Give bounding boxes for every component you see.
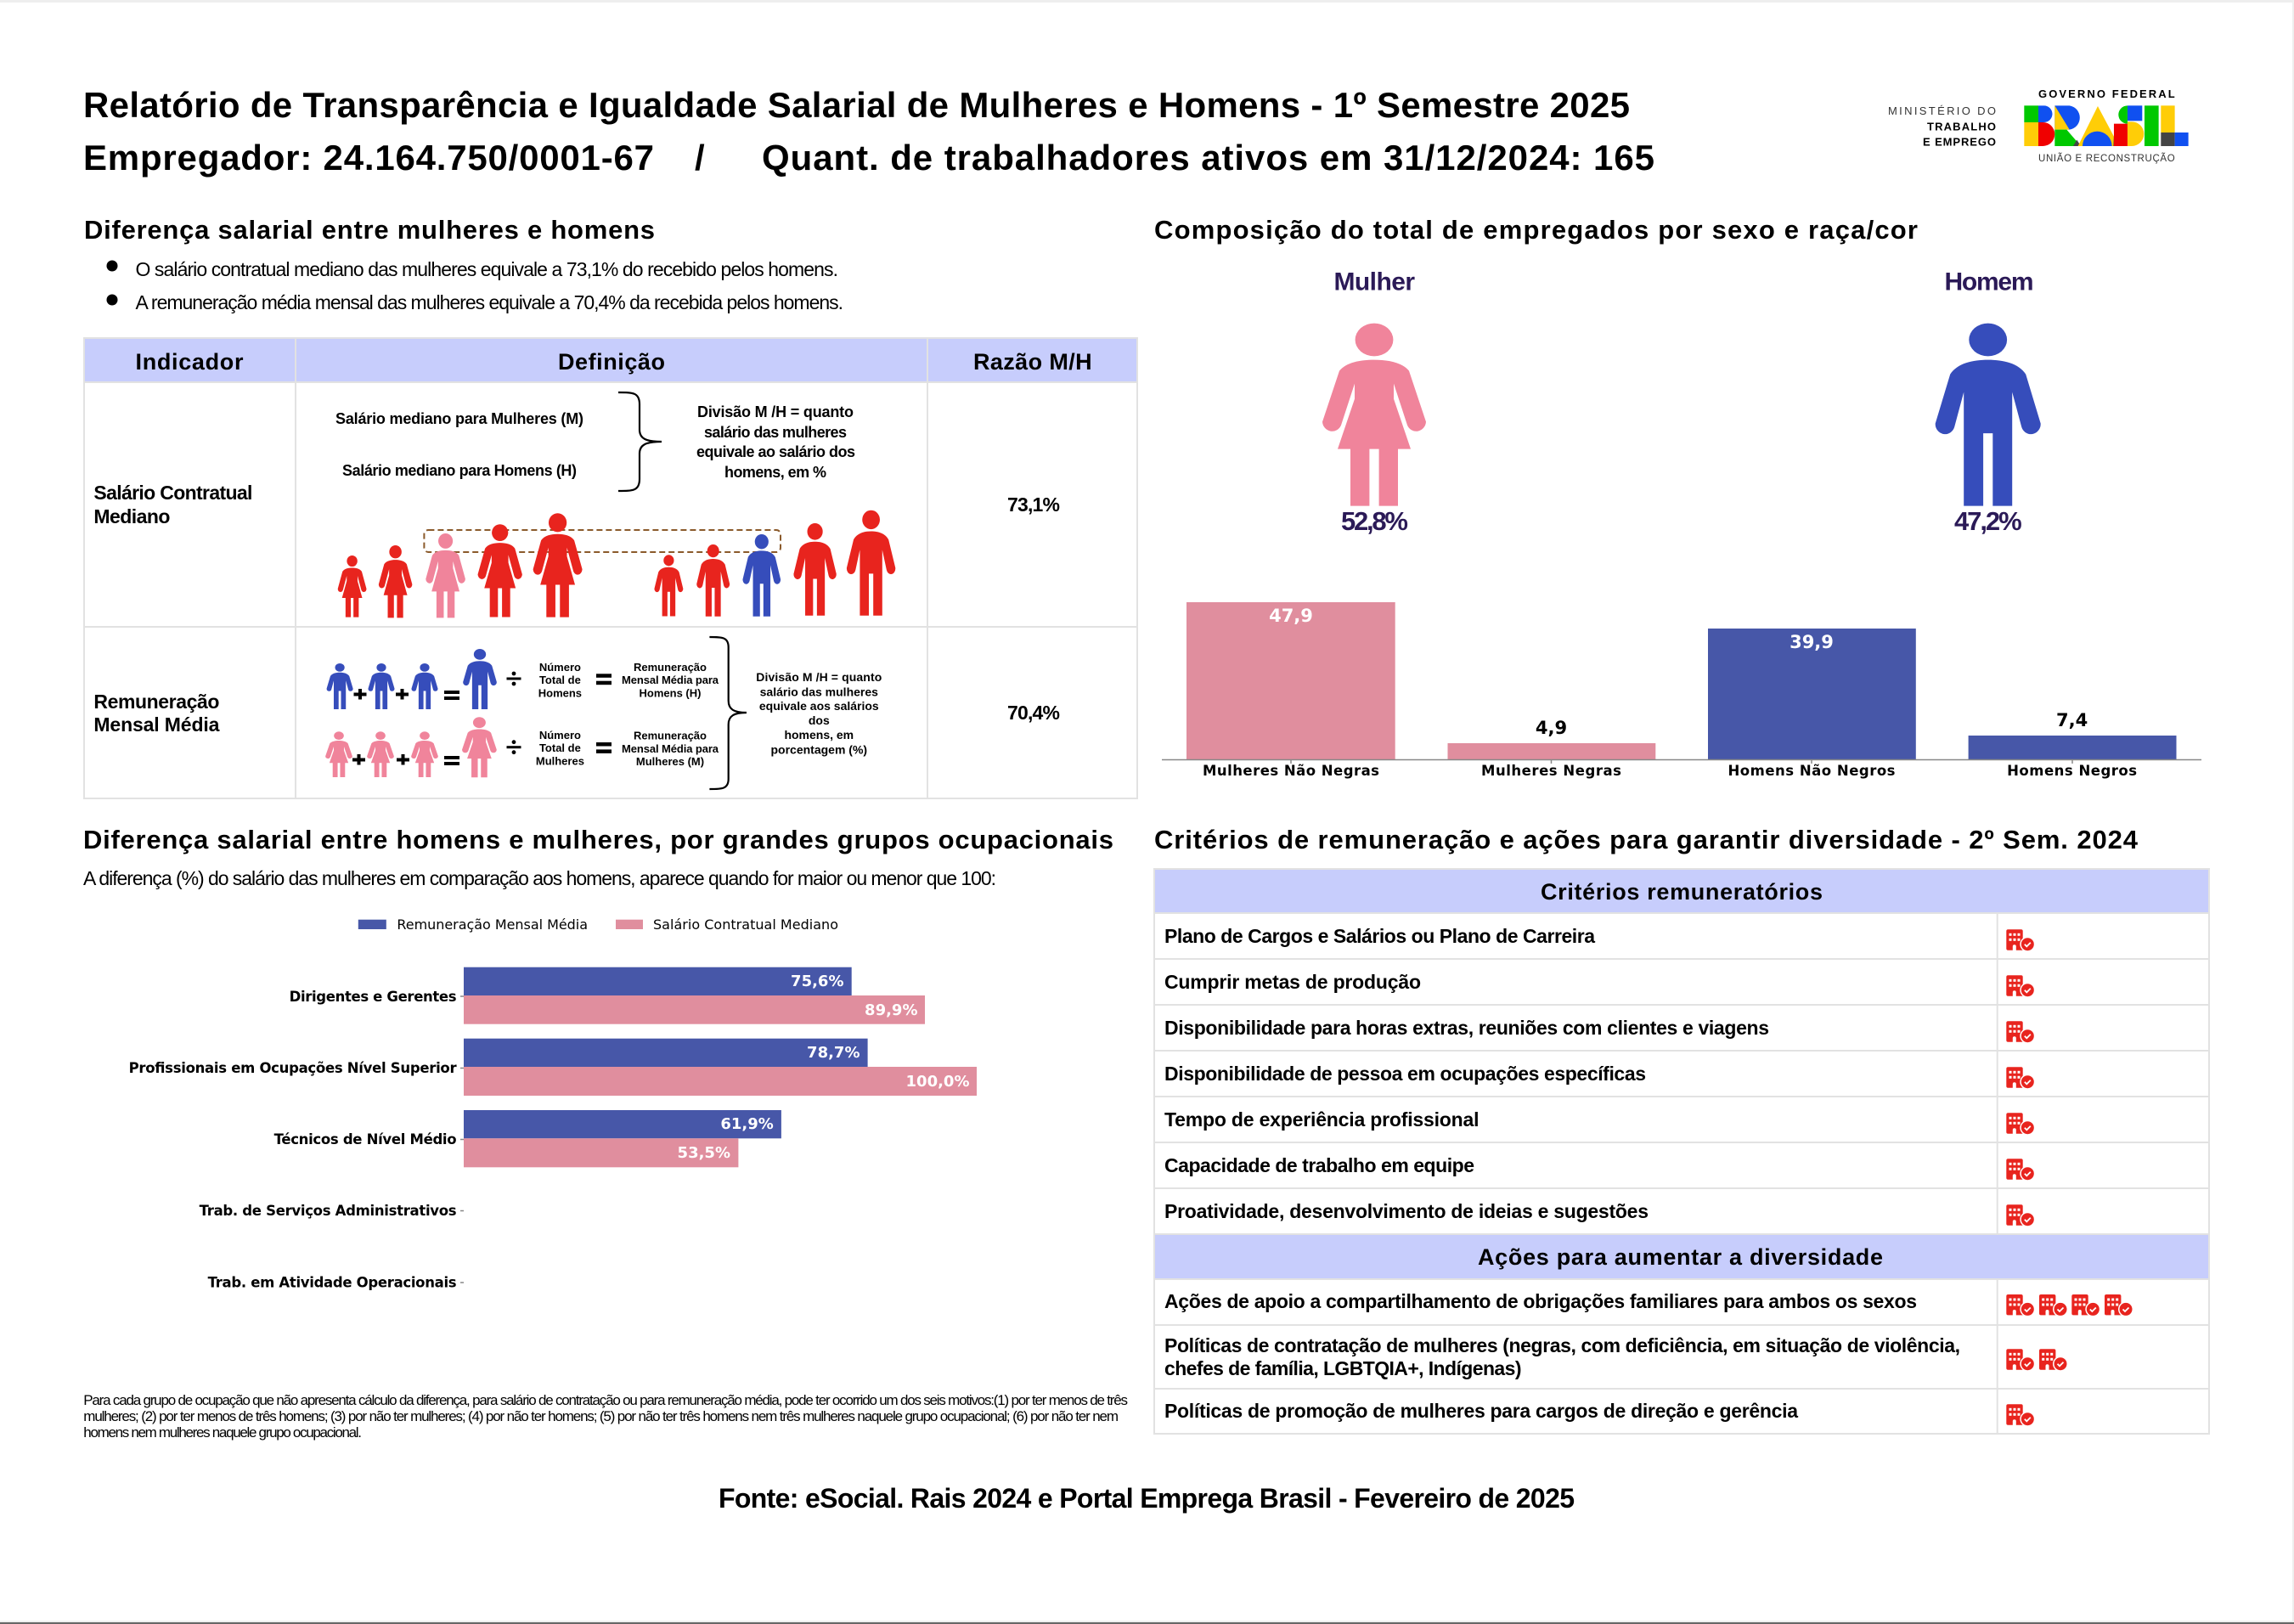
definition: average pay: Homens (H): [640, 686, 701, 700]
panel: indicator table: 73,1%: [1007, 493, 1060, 516]
definition: average pay: Divisão M /H = quanto: [756, 670, 882, 684]
bar chart: occupational groups: Profissionais em Ocupações Nível Superior: [129, 1060, 457, 1076]
bar chart: sex and race: 4,9: [1536, 718, 1567, 738]
panel: criteria table: Capacidade de trabalho em equipe: [1164, 1154, 1474, 1176]
source line: Fonte: eSocial. Rais 2024 e Portal Emprega Brasil - Fevereiro de 2025: [719, 1483, 1575, 1514]
title: Empregador: 24.164.750/0001-67: [83, 138, 654, 178]
panel: indicator table: Salário Contratual: [93, 482, 252, 504]
definition: average pay: Homens: [538, 686, 582, 700]
bar chart: sex and race: Mulheres Negras: [1481, 763, 1621, 779]
panel: indicator table: Remuneração: [93, 691, 219, 713]
panel: criteria table: chefes de família, LGBTQIA+, Indígenas): [1164, 1357, 1522, 1379]
definition: average pay: Mensal Média para: [622, 742, 719, 755]
icons: company check marks: [2006, 929, 2133, 1427]
bar chart: sex and race: 7,4: [2056, 710, 2088, 730]
definition: average pay: [325, 637, 882, 789]
panel: indicator table: Indicador: [136, 349, 244, 375]
panel: criteria table: Proatividade, desenvolvimento de ideias e sugestões: [1164, 1200, 1649, 1222]
definition: average pay: Número: [539, 729, 581, 742]
heading: diferença salarial: Diferença salarial entre mulheres e homens: [84, 215, 655, 245]
bar chart: occupational groups: 61,9%: [720, 1115, 774, 1133]
icon: woman with share: Mulher: [1333, 268, 1415, 296]
icon: man with share: 47,2%: [1954, 506, 2022, 536]
logo: Ministério do Trabalho e Emprego: TRABALHO: [1927, 120, 1996, 133]
definition: average pay: homens, em: [784, 728, 854, 742]
text block: bullet summary: O salário contratual mediano das mulheres equivale a 73,1% do recebido pelos homens.: [136, 258, 838, 280]
text block: chart subtitle: A diferença (%) do salário das mulheres em comparação aos homens, aparece quando for maior ou menor que 100:: [83, 867, 996, 889]
heading: grupos ocupacionais: Diferença salarial entre homens e mulheres, por grandes grupos ocupacionais: [83, 825, 1113, 854]
definition: average pay: equivale aos salários: [759, 699, 879, 713]
legend: Remuneração Mensal Média: [397, 916, 588, 933]
bar chart: sex and race: Homens Não Negros: [1728, 763, 1896, 779]
definition: average pay: Remuneração: [634, 661, 707, 674]
people: median illustration: [338, 510, 895, 617]
bar chart: occupational groups: 75,6%: [791, 973, 844, 990]
definition: average pay: dos: [809, 713, 830, 727]
text block: footnote: [83, 1392, 1128, 1441]
bar chart: occupational groups: 53,5%: [678, 1144, 730, 1162]
bar chart: occupational groups: Dirigentes e Gerentes: [290, 989, 457, 1005]
text block: footnote: Para cada grupo de ocupação que não apresenta cálculo da diferença, para salário de contratação ou para remuneração média, pode ter ocorrido um dos seis motivos:(1) por ter menos de três: [83, 1392, 1128, 1408]
bar chart: sex and race: Homens Negros: [2007, 763, 2137, 779]
panel: indicator table: Razão M/H: [973, 349, 1092, 375]
bar chart: occupational groups: 89,9%: [865, 1001, 917, 1019]
definition: average pay: Mulheres: [536, 754, 584, 768]
panel: criteria table: Plano de Cargos e Salários ou Plano de Carreira: [1164, 925, 1595, 947]
bar chart: occupational groups: [129, 967, 977, 1291]
panel: criteria table: Disponibilidade de pessoa em ocupações específicas: [1164, 1063, 1646, 1085]
logo: Ministério do Trabalho e Emprego: MINISTÉRIO DO: [1888, 104, 1996, 117]
panel: indicator table: Mediano: [93, 505, 170, 527]
title: Relatório de Transparência e Igualdade Salarial de Mulheres e Homens - 1º Semestre 2025: [83, 85, 1630, 125]
bar chart: sex and race: 47,9: [1269, 606, 1313, 626]
panel: criteria table: Políticas de promoção de mulheres para cargos de direção e gerência: [1164, 1400, 1798, 1422]
logo: Governo Federal Brasil: UNIÃO E RECONSTRUÇÃO: [2038, 153, 2175, 164]
icon: woman with share: 52,8%: [1341, 506, 1408, 536]
legend: Salário Contratual Mediano: [653, 916, 838, 933]
bar chart: sex and race: [1162, 602, 2201, 779]
title: Quant. de trabalhadores ativos em 31/12/2024: 165: [762, 138, 1654, 178]
definition: average pay: Remuneração: [634, 729, 707, 742]
panel: criteria table: Tempo de experiência profissional: [1164, 1108, 1480, 1131]
definition: average pay: Número: [539, 661, 581, 674]
bar chart: sex and race: Mulheres Não Negras: [1203, 763, 1379, 779]
legend: [358, 916, 838, 933]
panel: criteria table: Ações para aumentar a diversidade: [1478, 1244, 1883, 1270]
panel: indicator table: [84, 338, 1137, 798]
text block: footnote: mulheres; (2) por ter menos de três homens; (3) por não ter mulheres; (4) por não ter homens; (5) por não ter três homens nem três mulheres naquele grupo ocupacional; (6) por não ter nem: [83, 1408, 1119, 1424]
panel: criteria table: Políticas de contratação de mulheres (negras, com deficiência, em situação de violência,: [1164, 1334, 1960, 1356]
title: /: [695, 138, 705, 178]
brace: [709, 637, 747, 789]
definition: average pay: salário das mulheres: [760, 685, 878, 698]
panel: criteria table: Ações de apoio a compartilhamento de obrigações familiares para ambos os sexos: [1164, 1290, 1917, 1312]
bar chart: occupational groups: Trab. de Serviços Administrativos: [200, 1203, 457, 1219]
definition: median salary: Salário mediano para Mulheres (M): [335, 410, 583, 427]
icon: woman with share: [1322, 268, 1426, 536]
heading: critérios: Critérios de remuneração e ações para garantir diversidade - 2º Sem. 2024: [1154, 825, 2139, 854]
definition: median salary: [335, 392, 855, 491]
text block: footnote: homens nem mulheres naquele grupo ocupacional.: [83, 1424, 362, 1441]
definition: median salary: Salário mediano para Homens (H): [342, 462, 577, 479]
logo: Governo Federal Brasil: [2024, 87, 2189, 164]
definition: average pay: Total de: [539, 742, 581, 754]
definition: median salary: salário das mulheres: [704, 424, 847, 441]
bar chart: occupational groups: Técnicos de Nível Médio: [274, 1131, 457, 1148]
panel: indicator table: Mensal Média: [93, 713, 220, 736]
heading: composição: Composição do total de empregados por sexo e raça/cor: [1154, 215, 1918, 245]
text block: bullet summary: [107, 258, 843, 313]
icon: man with share: [1936, 268, 2041, 536]
logo: Ministério do Trabalho e Emprego: E EMPREGO: [1923, 135, 1996, 148]
definition: median salary: equivale ao salário dos: [696, 443, 855, 460]
bar chart: occupational groups: Trab. em Atividade Operacionais: [208, 1274, 457, 1291]
bar chart: occupational groups: 100,0%: [906, 1073, 970, 1091]
definition: average pay: Mensal Média para: [622, 674, 719, 686]
definition: median salary: homens, em %: [724, 464, 826, 481]
logo: Ministério do Trabalho e Emprego: [1888, 104, 1996, 148]
bar chart: occupational groups: 78,7%: [807, 1044, 860, 1062]
text block: bullet summary: A remuneração média mensal das mulheres equivale a 70,4% da recebida pelos homens.: [136, 291, 843, 313]
title: [83, 85, 1654, 178]
definition: average pay: porcentagem (%): [771, 742, 867, 756]
panel: criteria table: Critérios remuneratórios: [1541, 879, 1823, 905]
logo: Governo Federal Brasil: GOVERNO FEDERAL: [2038, 87, 2175, 100]
brace: [618, 392, 662, 491]
bar chart: sex and race: 39,9: [1790, 632, 1834, 652]
definition: median salary: Divisão M /H = quanto: [697, 403, 854, 420]
icon: man with share: Homem: [1945, 268, 2033, 296]
panel: criteria table: Disponibilidade para horas extras, reuniões com clientes e viagens: [1164, 1017, 1769, 1039]
panel: indicator table: 70,4%: [1007, 702, 1060, 724]
definition: average pay: Total de: [539, 674, 581, 686]
panel: criteria table: Cumprir metas de produção: [1164, 971, 1421, 993]
panel: indicator table: Definição: [558, 349, 665, 375]
dashed median marker: [424, 530, 781, 552]
definition: average pay: Mulheres (M): [636, 755, 704, 768]
panel: criteria table: [1154, 869, 2209, 1434]
